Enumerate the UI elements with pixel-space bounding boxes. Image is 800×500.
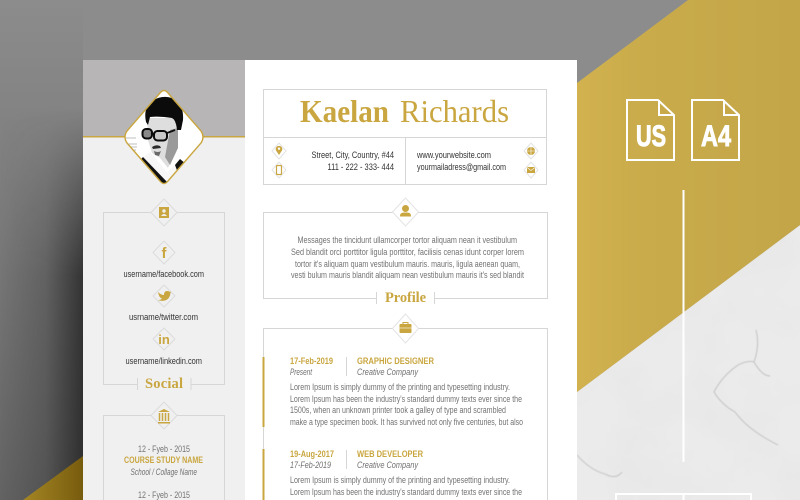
profile text: Messages the tincidunt ullamcorper tortor aliquam nean it vestibulum	[298, 235, 517, 245]
job entry: web developer: Lorem Ipsum is simply dummy of the printing and typesetting industry.	[290, 475, 510, 485]
panel: experience	[262, 314, 548, 500]
heading: profile: Profile	[385, 290, 427, 306]
icon: twitter	[153, 285, 175, 307]
title: name	[300, 93, 509, 129]
job entry: graphic designer: 1500s, when an unknown printer took a galley of type and scrambled	[290, 405, 506, 415]
job entry: web developer: 17-Feb-2019	[290, 460, 331, 470]
twitter handle: usrname/twitter.com	[129, 312, 198, 322]
web and email	[416, 150, 506, 172]
linkedin handle: username/linkedin.com	[126, 356, 202, 366]
icon: facebook	[153, 241, 175, 264]
job entry: web developer: Lorem Ipsum has been the industry's standard dummy texts ever since the	[290, 487, 522, 497]
vertical divider line	[682, 190, 684, 462]
icon: A4 document	[692, 100, 739, 160]
facebook handle: username/facebook.com	[124, 269, 204, 279]
title: name: Richards	[400, 93, 509, 129]
education entry	[124, 444, 203, 477]
panel: social	[104, 199, 224, 392]
job entry: web developer	[262, 449, 522, 500]
icon: person	[392, 198, 418, 226]
size guide box	[616, 494, 751, 500]
job entry: graphic designer: Present	[290, 367, 312, 377]
job entry: graphic designer: 17-Feb-2019	[290, 356, 333, 366]
job entry: graphic designer: make a type specimen book. It has survived not only five centuries, but also	[290, 417, 523, 427]
icon: phone	[272, 162, 286, 178]
icon: mail	[524, 162, 538, 178]
job entry: graphic designer	[262, 356, 523, 427]
web and email: yourmailadress@gmail.com	[417, 162, 506, 172]
icon: contact card	[151, 199, 177, 226]
web and email: www.yourwebsite.com	[416, 150, 491, 160]
job entry: graphic designer: Lorem Ipsum is simply dummy of the printing and typesetting industry.	[290, 382, 510, 392]
address and phone	[312, 150, 394, 172]
job entry: web developer: Creative Company	[357, 460, 418, 470]
icon: linkedin	[153, 328, 175, 350]
job entry: graphic designer: Creative Company	[357, 367, 418, 377]
profile text: Sed blandit orci porttitor ligula porttitor, facilisis cenas idunt corper lorem	[291, 247, 524, 257]
icon: institution	[151, 402, 177, 429]
profile text	[291, 235, 524, 280]
icon: linkedin: in	[158, 332, 170, 347]
panel: profile	[264, 198, 548, 306]
panel: name and contact header	[264, 90, 546, 184]
icon: US document: US	[636, 120, 666, 153]
job entry: graphic designer: GRAPHIC DESIGNER	[357, 356, 434, 366]
icon: US document	[627, 100, 674, 160]
profile photo	[124, 90, 203, 191]
education entry: 12 - Fyeb - 2015	[138, 444, 190, 454]
heading: social: Social	[145, 376, 183, 392]
profile text: vesti bulum mauris blandit aliquam nean vestibulum mauris it's sed blandit	[291, 270, 524, 280]
panel: resume sheet	[83, 60, 577, 500]
background: marble corner	[577, 225, 800, 500]
profile text: tortor it's aliquam quam vestibulum mauris. mauris, ligula aenean quam,	[295, 259, 520, 269]
education entry date: 12 - Fyeb - 2015	[138, 490, 190, 500]
address and phone: 111 - 222 - 333- 444	[328, 162, 394, 172]
education entry: COURSE STUDY NAME	[124, 455, 203, 465]
address and phone: Street, City, Country, #44	[312, 150, 394, 160]
background: gold diagonal band	[577, 0, 800, 392]
icon: briefcase	[392, 314, 418, 343]
title: name: Kaelan	[300, 93, 389, 129]
background: gray paper	[0, 100, 83, 500]
background: left gold corner	[23, 456, 83, 500]
job entry: graphic designer: Lorem Ipsum has been the industry's standard dummy texts ever since the	[290, 394, 522, 404]
job entry: web developer: WEB DEVELOPER	[357, 449, 423, 459]
icon: facebook: f	[162, 245, 168, 262]
icon: A4 document: A4	[701, 120, 731, 153]
panel: education	[104, 402, 224, 500]
icon: location	[272, 143, 286, 159]
job entry: web developer: 19-Aug-2017	[290, 449, 334, 459]
education entry: School / Collage Name	[130, 467, 197, 477]
icon: globe	[524, 143, 538, 159]
